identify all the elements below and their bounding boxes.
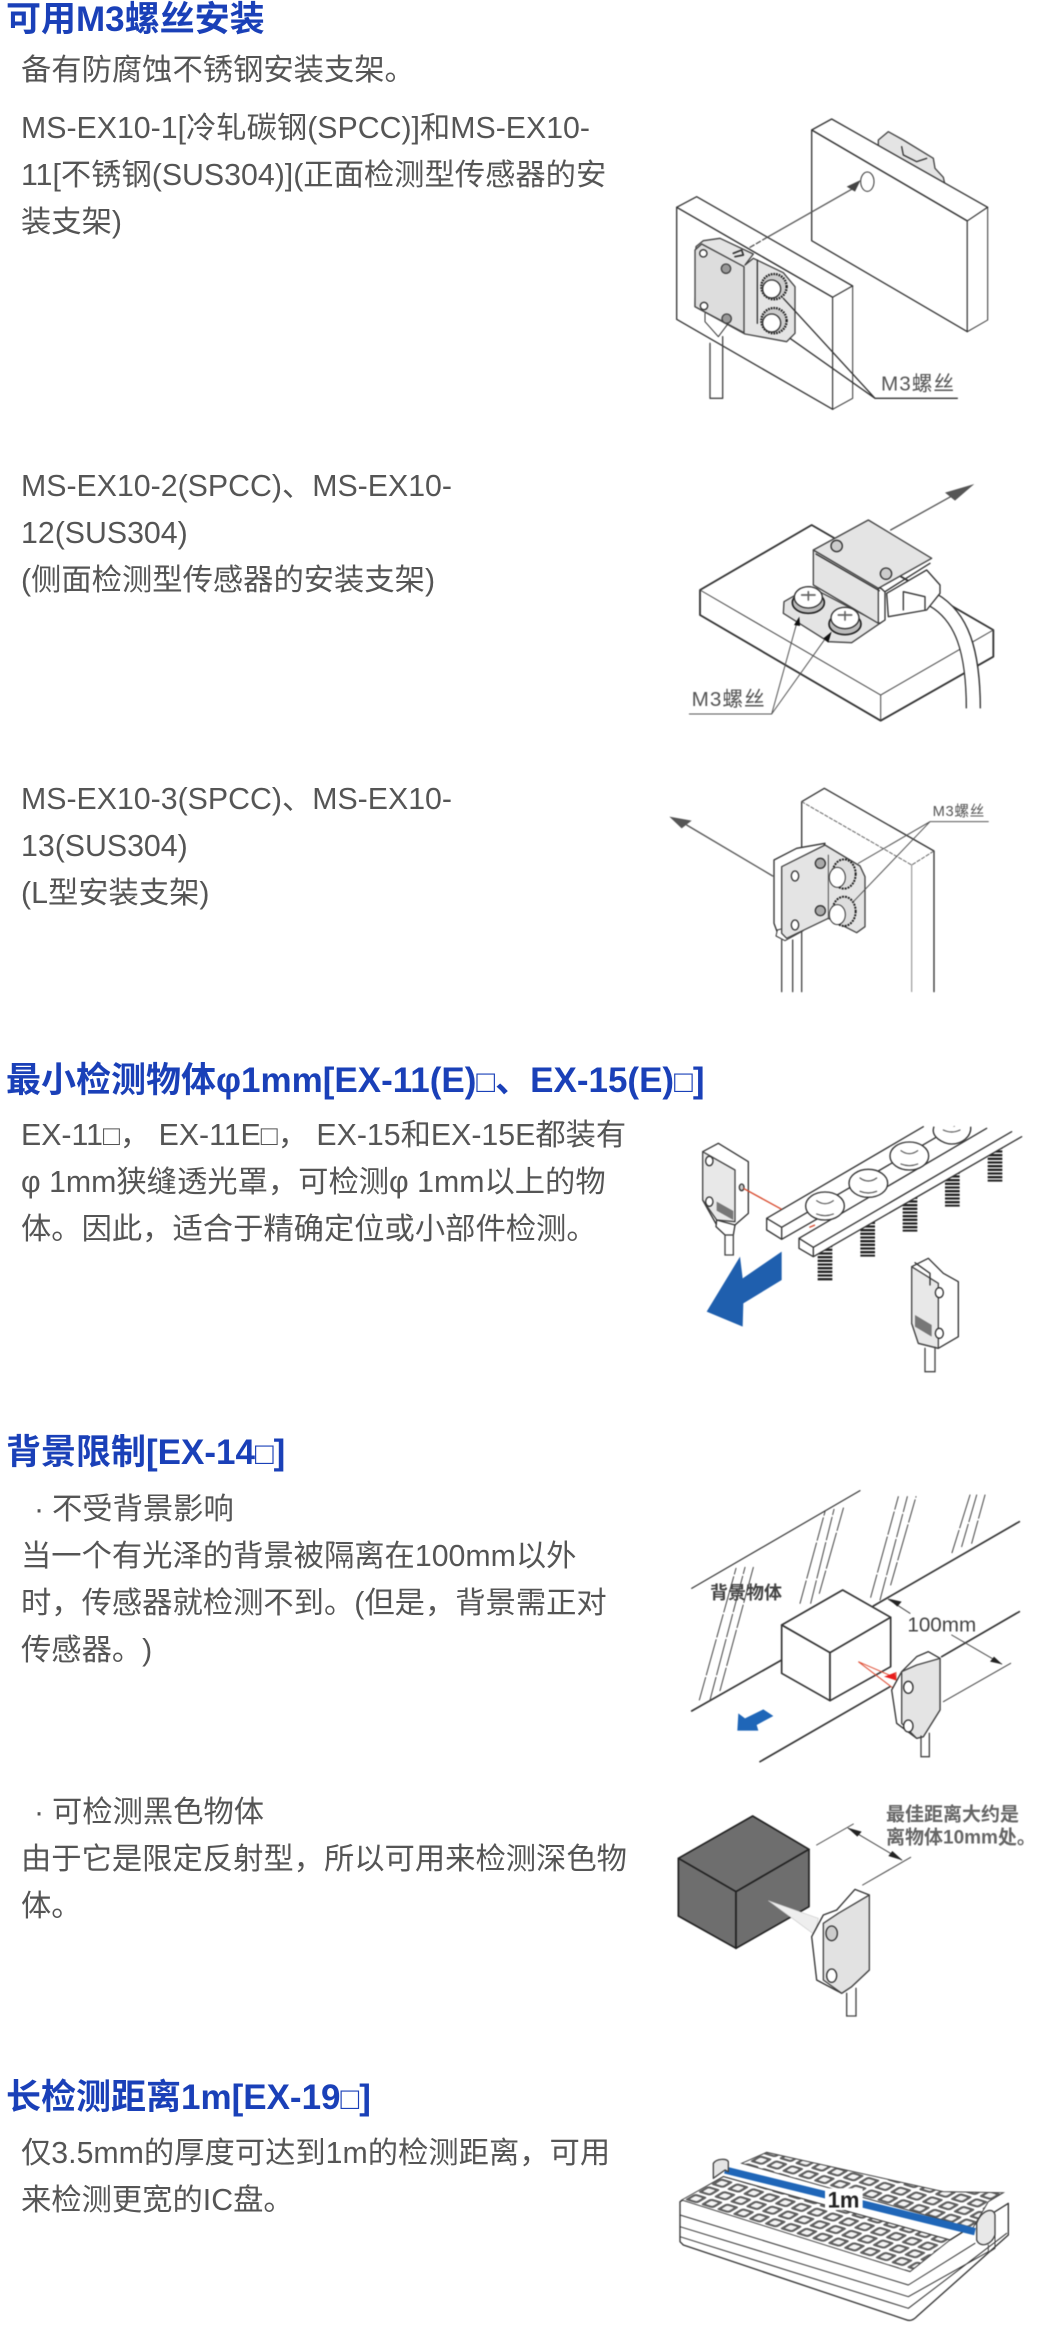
illustration: front sensing bracket [675, 118, 989, 411]
screw threads [825, 1147, 995, 1282]
callout: M3 screws [783, 298, 957, 398]
illustration: L-type bracket [669, 787, 990, 993]
illustration: dark object detection [676, 1803, 1036, 2018]
callout: M3 screws [689, 617, 832, 714]
rail one [767, 1127, 957, 1239]
conveyor lines [692, 1491, 1019, 1762]
cable [782, 930, 802, 992]
dimension 100mm [888, 1599, 1011, 1702]
heading: background suppression: 背景限制[EX-14□] [6, 1433, 285, 1472]
text: MS-EX10-2 bracket: MS-EX10-2(SPCC)、MS-EX10- [21, 470, 452, 503]
tray body [680, 2177, 1008, 2320]
panel: minimum detectable object [6, 1061, 1023, 1374]
callout: M3 screws: M3螺丝 [933, 803, 985, 820]
label: optimal distance: 最佳距离大约是 [886, 1803, 1019, 1826]
dark box [678, 1816, 809, 1948]
text: 1m sensing range description: 来检测更宽的IC盘。 [21, 2184, 294, 2217]
illustration: IC tray with 1m beam [678, 2151, 1010, 2322]
rail two [799, 1127, 1022, 1257]
blue arrow [707, 1252, 782, 1327]
text: MS-EX10-3 bracket: 13(SUS304) [21, 830, 188, 863]
arrow [669, 817, 773, 876]
text: slit mask description: φ 1mm狭缝透光罩，可检测φ 1mm以上的物 [21, 1166, 606, 1199]
heading: long sensing range: 长检测距离1m[EX-19□] [6, 2078, 371, 2117]
label: 1m: 1m [828, 2188, 859, 2213]
red beam [743, 1188, 815, 1227]
dimension 100mm: 100mm [907, 1614, 976, 1637]
text: MS-EX10-3 bracket [21, 783, 452, 910]
board [700, 525, 993, 721]
right sensor [912, 1258, 958, 1372]
text: slit mask description: EX-11□， EX-11E□， EX-15和EX-15E都装有 [21, 1119, 626, 1152]
illustration: background object at 100mm [690, 1490, 1021, 1764]
heading: minimum detectable object: 最小检测物体φ1mm[EX-11(E)□、EX-15(E)□] [6, 1061, 704, 1100]
sensor and bracket [783, 520, 940, 643]
blue beam [725, 2170, 975, 2232]
label: optimal distance: 离物体10mm处。 [886, 1825, 1036, 1848]
text: unaffected by background [21, 1493, 607, 1667]
left sensor [703, 1143, 748, 1255]
callout: M3 screws: M3螺丝 [692, 688, 766, 711]
text: MS-EX10-3 bracket: (L型安装支架) [21, 877, 210, 910]
heading: M3 screw mounting: 可用M3螺丝安装 [6, 0, 265, 39]
text: 1m sensing range description [21, 2137, 610, 2217]
left plate with sensor [677, 197, 853, 409]
text: MS-EX10-1 bracket: 装支架) [21, 206, 122, 239]
dimension [817, 1824, 911, 1885]
arrow [891, 484, 974, 530]
label: background object: 背景物体 [710, 1583, 782, 1603]
callout: M3 screws [853, 803, 988, 902]
text: corrosion resistant bracket: 备有防腐蚀不锈钢安装支架。 [21, 54, 415, 87]
illustration: sensors detecting screw rail [701, 1125, 1023, 1374]
sensor [892, 1652, 940, 1757]
text: MS-EX10-2 bracket: 12(SUS304) [21, 517, 188, 550]
text: unaffected by background: 时，传感器就检测不到。(但是，背景需正对 [21, 1587, 607, 1620]
text: slit mask description [21, 1119, 626, 1246]
arrow to the hole [750, 180, 861, 247]
screw heads [806, 1127, 971, 1220]
illustration: side sensing bracket [688, 484, 996, 722]
text: unaffected by background: 当一个有光泽的背景被隔离在100mm以外 [21, 1540, 576, 1573]
text: detects black objects: 由于它是限定反射型，所以可用来检测深色物 [21, 1843, 627, 1876]
text: detects black objects: 体。 [21, 1890, 82, 1923]
panel: background suppression [6, 1433, 1036, 2018]
text: unaffected by background: 传感器。) [21, 1634, 152, 1667]
red arrowhead [884, 1673, 896, 1680]
text: MS-EX10-2 bracket: (侧面检测型传感器的安装支架) [21, 564, 435, 597]
tray cell grids [682, 2152, 1003, 2272]
sensor [812, 1889, 869, 2016]
text: detects black objects [21, 1796, 627, 1923]
callout: M3 screws: M3螺丝 [881, 373, 955, 396]
text: detects black objects: · [34, 1796, 44, 1829]
sensor and bracket [774, 843, 865, 941]
text: MS-EX10-3 bracket: MS-EX10-3(SPCC)、MS-EX10- [21, 783, 452, 816]
box [782, 1590, 891, 1701]
wall [802, 788, 934, 992]
left sensor [713, 2159, 728, 2178]
text: MS-EX10-1 bracket [21, 112, 606, 239]
text: unaffected by background: 不受背景影响 [52, 1493, 234, 1526]
beam [858, 1662, 897, 1688]
text: detects black objects: 可检测黑色物体 [52, 1796, 264, 1829]
text: MS-EX10-1 bracket: 11[不锈钢(SUS304)](正面检测型传感器的安 [21, 159, 606, 192]
panel: long sensing range [6, 2078, 1010, 2322]
text: MS-EX10-1 bracket: MS-EX10-1[冷轧碳钢(SPCC)]和MS-EX10- [21, 112, 590, 145]
beam [768, 1901, 818, 1935]
blue arrow [737, 1709, 773, 1731]
text: MS-EX10-2 bracket [21, 470, 452, 597]
cable [933, 600, 973, 710]
text: 1m sensing range description: 仅3.5mm的厚度可达到1m的检测距离，可用 [21, 2137, 610, 2170]
background hatch [699, 1495, 985, 1700]
text: unaffected by background: · [34, 1493, 44, 1526]
panel: M3 screw mounting [6, 0, 996, 993]
text: slit mask description: 体。因此，适合于精确定位或小部件检测。 [21, 1213, 597, 1246]
right plate with sensor behind [812, 119, 988, 332]
right sensor [977, 2210, 995, 2253]
